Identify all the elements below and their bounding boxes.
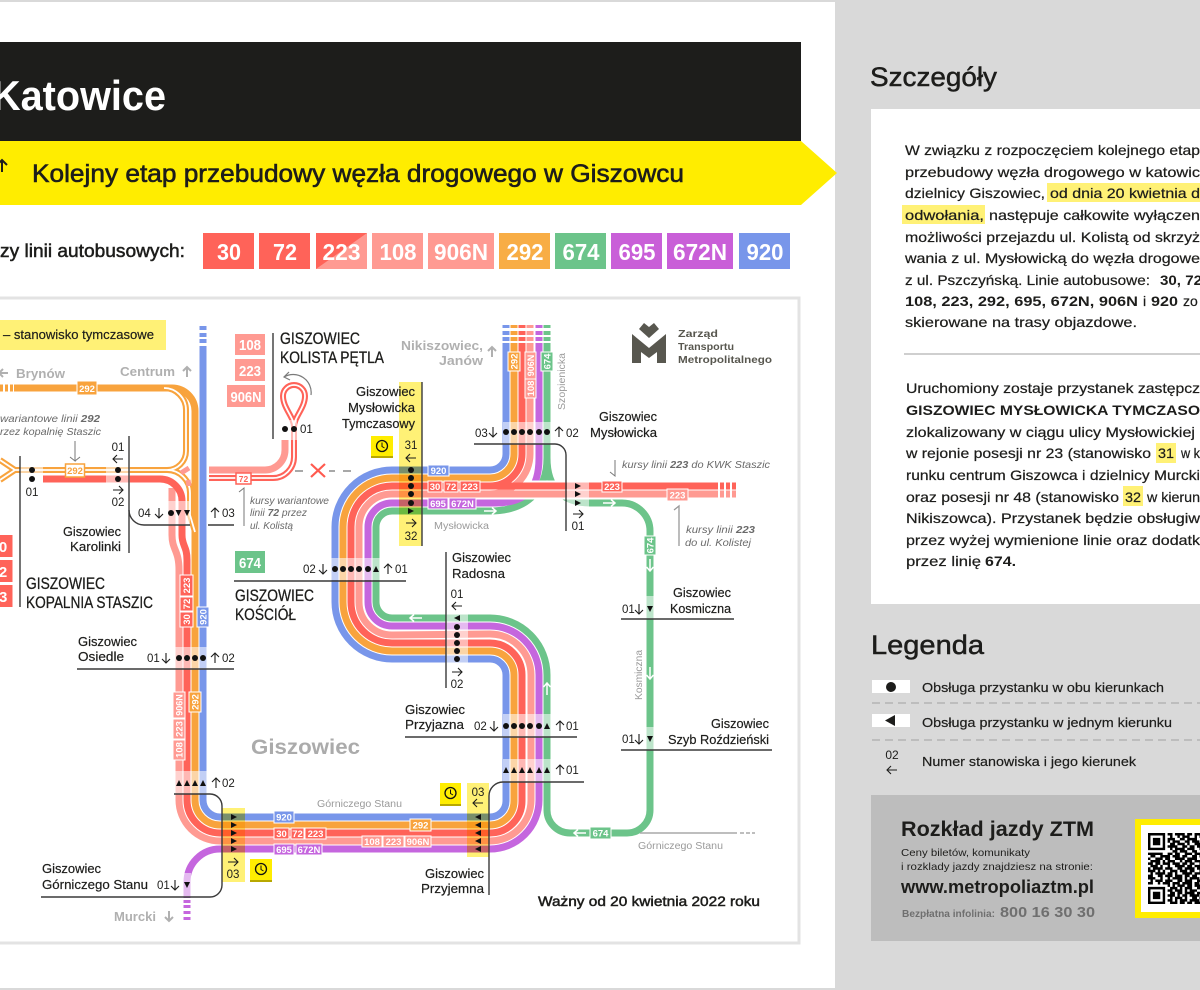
panel: right grey sidebar xyxy=(835,0,1200,990)
variant track: line 292 through Staszic xyxy=(0,388,195,532)
annotation: variant 292 xyxy=(0,413,102,461)
stop name: Karolinki: Karolinki xyxy=(70,539,121,554)
platform numbers: 03 xyxy=(475,428,488,440)
street names: Górniczego Stanu xyxy=(317,799,402,810)
badges: bottom horizontal: 920 xyxy=(276,812,292,824)
badges: bottom horizontal: 108 xyxy=(364,837,380,848)
logo: ZTM: Metropolitalnego xyxy=(678,354,772,366)
line badge 72 xyxy=(259,233,310,269)
track: salmon trunk xyxy=(172,343,531,841)
paragraph one: skierowane na trasy objazdowe. xyxy=(905,314,1137,330)
paragraph one: od dnia 20 kwietnia d xyxy=(1050,185,1200,201)
paragraph one: 30, 72 xyxy=(1160,272,1200,288)
paragraph two: przez wyżej wymienione linie oraz dodatk xyxy=(906,532,1200,548)
annotation: variant 72 xyxy=(239,488,329,532)
paragraph one: przebudowy węzła drogowego w katowic xyxy=(905,164,1200,180)
badges: trunk 223 72 30: 72 xyxy=(182,599,193,609)
badges: bottom horizontal: 292 xyxy=(413,820,428,832)
platform numbers: 01 xyxy=(112,442,124,454)
annotation: variant 292: wariantowe linii 292 xyxy=(0,413,100,425)
platform numbers: 01 xyxy=(451,589,463,601)
route badges xyxy=(66,334,688,856)
panel: timetable info: Ceny biletów, komunikaty xyxy=(901,847,1031,859)
paragraph two: Uruchomiony zostaje przystanek zastępcz xyxy=(906,380,1200,396)
title bar xyxy=(0,42,801,141)
platform numbers: 03 xyxy=(222,508,235,520)
platform numbers: 01 xyxy=(26,487,38,499)
badge: right 223 salmon xyxy=(667,489,688,502)
annotation: 223 to KWK Staszic: kursy linii 223 do KWK Staszic xyxy=(622,459,771,471)
subtitle arrow banner xyxy=(0,141,837,205)
stop name: Przyjemna: Przyjemna xyxy=(421,881,485,896)
panel: timetable info: 800 16 30 30 xyxy=(1000,904,1095,921)
panel: details text xyxy=(871,109,1200,604)
platform numbers: 02 xyxy=(222,778,235,790)
badges: trunk 906N 223 108: 906N xyxy=(174,694,184,716)
legend row: platform number: Numer stanowiska i jego kierunek xyxy=(922,754,1137,769)
panel: timetable info xyxy=(871,795,1200,941)
badge: trunk 292: 292 xyxy=(190,694,202,710)
stop name: Kosmiczna: Kosmiczna xyxy=(670,601,732,616)
track: red trunk xyxy=(43,343,522,833)
badges: trunk 906N 223 108 xyxy=(173,692,186,760)
badges: Myslowicka horizontal: 672N xyxy=(451,499,474,510)
paragraph two: przez linię xyxy=(906,553,981,569)
badge: green 674 bottom: 674 xyxy=(593,828,609,840)
line badge 920 xyxy=(739,233,790,269)
stop name: Kolista Petla: GISZOWIEC xyxy=(280,329,360,348)
paragraph two: oraz posesji nr 48 (stanowisko xyxy=(906,489,1119,505)
line badge 920: 920 xyxy=(746,239,784,265)
platform numbers: 01 xyxy=(622,734,635,746)
stop name: Przyjazna xyxy=(405,702,465,732)
annotation: variant 72: ul. Kolistą xyxy=(250,520,293,532)
badge: variant 292: 292 xyxy=(67,466,83,477)
platform numbers: 02 xyxy=(303,564,316,576)
platform numbers: 02 xyxy=(474,721,487,733)
bus lines row xyxy=(0,233,790,269)
line badge 223: 223 xyxy=(322,239,360,265)
temporary stop legend: – stanowisko tymczasowe xyxy=(3,327,154,342)
paragraph one: zo xyxy=(1183,293,1198,309)
badge: trunk 920: 920 xyxy=(198,609,210,625)
annotation: variant 292: rzez kopalnię Staszic xyxy=(0,426,102,438)
paragraph one: W związku z rozpoczęciem kolejnego etap xyxy=(905,142,1200,158)
stop name: Karolinki xyxy=(63,524,121,554)
badge: variant 72 xyxy=(236,473,251,484)
district name: Giszowiec xyxy=(251,736,360,759)
badges: bottom horizontal: 223 xyxy=(386,837,401,848)
stop name: Karolinki: Giszowiec xyxy=(63,524,121,539)
annotation: variant 72: kursy wariantowe xyxy=(250,495,329,507)
stop name: Radosna: Giszowiec xyxy=(452,550,511,565)
badge: Kolista 108 xyxy=(235,334,265,355)
stop name: Gorniczego Stanu xyxy=(42,861,148,892)
panel: timetable info: i rozklady jazdy znajdziesz na stronie: xyxy=(901,861,1093,873)
stop name: Przyjazna: Giszowiec xyxy=(405,702,465,717)
heading: Legenda: Legenda xyxy=(871,630,985,660)
badge: Kolista 108: 108 xyxy=(239,337,261,354)
stop markers xyxy=(29,426,653,888)
badges: trunk 223 72 30: 30 xyxy=(182,614,193,625)
badge: variant 72: 72 xyxy=(239,474,248,484)
badges: Myslowicka horizontal: 920 xyxy=(431,466,446,477)
badge: 292 top left xyxy=(77,381,97,395)
track: orange line 292 xyxy=(14,343,514,825)
stop name: Myslowicka: Giszowiec xyxy=(599,409,657,424)
panel: legend xyxy=(872,680,1200,774)
subtitle arrow banner: Kolejny etap przebudowy węzła drogowego w Giszowcu xyxy=(32,160,684,188)
line badge 674 xyxy=(555,233,606,269)
paragraph one: odwołania, xyxy=(905,207,984,223)
direction labels: Murcki xyxy=(114,909,156,924)
legend row: one direction: Obsługa przystanku w jednym kierunku xyxy=(922,715,1172,730)
paragraph two: runku centrum Giszowca i dzielnicy Murcki xyxy=(906,467,1200,483)
platform numbers: 01 xyxy=(157,880,170,892)
panel: route map xyxy=(0,298,799,943)
stop name: Przyjazna: Przyjazna xyxy=(405,717,465,732)
platform numbers: 02 xyxy=(112,497,124,509)
white casing over fork xyxy=(490,480,718,500)
paragraph two: 31 xyxy=(1158,445,1174,461)
platform numbers: 04 xyxy=(138,508,151,520)
badge: green 674 bottom xyxy=(590,827,611,840)
stop name: Radosna xyxy=(452,550,511,581)
badge: 292 top left: 292 xyxy=(79,384,95,395)
platform numbers: 31 xyxy=(405,440,417,452)
badges: trunk 906N 223 108: 223 xyxy=(174,721,186,737)
stop name: Myslowicka Tymczasowy: Giszowiec xyxy=(356,384,415,399)
badges: bottom horizontal: 30 xyxy=(276,829,287,840)
paragraph two: w kierun xyxy=(1146,489,1200,505)
temporary stop zones xyxy=(222,382,489,882)
badges: Myslowicka horizontal xyxy=(428,465,480,510)
badges: bottom horizontal: 695 xyxy=(276,845,293,856)
closed road mark xyxy=(295,460,355,482)
badges: top vertical: 906N xyxy=(526,355,536,376)
paragraph one: 920 xyxy=(1151,293,1178,309)
badges: bottom horizontal: 672N xyxy=(298,845,320,856)
street names xyxy=(317,353,755,852)
badges: top vertical: 674 xyxy=(542,353,554,369)
stop name: Myslowicka Tymczasowy: Mysłowicka xyxy=(348,400,416,415)
badges: Myslowicka horizontal: 30 xyxy=(430,482,440,493)
badges: top vertical: 108 xyxy=(526,381,537,396)
line badge 292 xyxy=(499,233,550,269)
platform numbers: 32 xyxy=(405,531,417,543)
badges: trunk 223 72 30: 223 xyxy=(182,578,193,593)
platform numbers: 01 xyxy=(147,653,160,665)
temporary stop legend xyxy=(0,320,166,350)
paragraph two: zlokalizowany w ciągu ulicy Mysłowickiej xyxy=(906,424,1195,440)
direction labels xyxy=(0,338,496,924)
line badge 30: 30 xyxy=(217,239,241,265)
stop name: Szyb Rozdzienski xyxy=(668,716,769,747)
paragraph one: wania z ul. Mysłowicką do węzła drogowe xyxy=(904,250,1200,266)
logo: ZTM: Transportu xyxy=(678,341,734,353)
stop name: Osiedle: Osiedle xyxy=(78,649,124,664)
badges: top vertical xyxy=(508,352,554,398)
line badge 108 xyxy=(372,233,423,269)
platform numbers: 02 xyxy=(451,679,463,691)
paragraph one xyxy=(904,142,1200,330)
badges: bottom horizontal: 906N xyxy=(407,837,429,848)
annotation: variant 72: linii 72 przez xyxy=(250,507,308,519)
stop name: Kosciol xyxy=(235,586,314,624)
stop name: Myslowicka Tymczasowy xyxy=(342,384,416,431)
line badge 108: 108 xyxy=(380,239,417,265)
stop name: Myslowicka Tymczasowy: Tymczasowy xyxy=(342,416,415,431)
badge: green 674 right: 674 xyxy=(646,537,656,553)
stop name: Osiedle: Giszowiec xyxy=(78,634,137,649)
paragraph one: 108, 223, 292, 695, 672N, 906N xyxy=(905,293,1138,309)
badges: Myslowicka horizontal: 223 xyxy=(462,482,478,493)
annotation: 223 to KWK Staszic xyxy=(610,459,771,476)
legend row: platform number xyxy=(885,748,1137,774)
track: line 695 672N purple xyxy=(187,343,539,898)
paragraph one: dzielnicy Giszowiec, xyxy=(905,185,1045,201)
stop name: Przyjemna: Giszowiec xyxy=(425,866,484,881)
left cut-off badges xyxy=(0,535,12,607)
paragraph two: Nikiszowca). Przystanek będzie obsługiw xyxy=(906,510,1200,526)
stop name: Kopalnia Staszic: GISZOWIEC xyxy=(26,574,105,593)
stop name: Myslowicka: Mysłowicka xyxy=(590,425,658,440)
legend row: platform number: 02 xyxy=(885,748,899,762)
street names: Górniczego Stanu xyxy=(638,841,723,852)
platform direction arrows xyxy=(113,427,643,890)
platform numbers: 03 xyxy=(472,787,484,799)
line badge 672N: 672N xyxy=(673,239,727,265)
stop name: Kosmiczna: Giszowiec xyxy=(673,585,731,600)
badges: Myslowicka horizontal: 695 xyxy=(430,499,447,510)
line badge 906N xyxy=(428,233,494,269)
flow arrows on green line xyxy=(410,500,654,836)
stop name: Przyjemna xyxy=(421,866,485,896)
logo: ZTM: Zarząd xyxy=(678,328,718,340)
stop name: Radosna: Radosna xyxy=(452,566,506,581)
badge: trunk 920 xyxy=(197,607,210,627)
icon: clock Gorniczego xyxy=(250,859,272,882)
stop name: Kosmiczna xyxy=(670,585,732,616)
platform numbers: 02 xyxy=(222,653,235,665)
logo: ZTM xyxy=(632,323,772,366)
icon: clock Przyjemna xyxy=(440,783,461,806)
street names: Szopienicka xyxy=(557,353,568,410)
badge: Kolista 223 xyxy=(235,359,265,381)
track: line 674 green xyxy=(376,343,650,833)
line badge 672N xyxy=(667,233,733,269)
paragraph two: GISZOWIEC MYSŁOWICKA TYMCZASO xyxy=(906,402,1200,418)
badge: Kolista 906N: 906N xyxy=(230,389,262,406)
badge: trunk 292 xyxy=(189,692,202,712)
badges: trunk 906N 223 108: 108 xyxy=(174,742,186,758)
clock icons xyxy=(250,436,461,882)
stop name: Kosciol: KOŚCIÓŁ xyxy=(235,605,296,624)
street names: Kosmiczna xyxy=(634,650,645,700)
route tracks xyxy=(0,325,736,920)
badge: Kolista 223: 223 xyxy=(239,363,261,380)
stop name: Szyb Rozdzienski: Szyb Roździeński xyxy=(668,732,769,747)
badges: trunk 223 72 30 xyxy=(180,575,193,627)
legend row: both directions: Obsługa przystanku w obu kierunkach xyxy=(922,680,1164,695)
stop name: Kosciol: GISZOWIEC xyxy=(235,586,314,605)
stop name: Myslowicka xyxy=(590,409,658,440)
annotation: 223 to Kolista xyxy=(674,506,755,549)
annotation: 223 to Kolista: kursy linii 223 xyxy=(686,524,755,536)
line badge 695 xyxy=(611,233,662,269)
panel: timetable info: www.metropoliaztm.pl xyxy=(900,877,1094,897)
direction labels: Nikiszowiec, xyxy=(401,338,483,353)
paragraph one: z ul. Pszczyńską. Linie autobusowe: xyxy=(905,272,1150,288)
direction labels: Centrum xyxy=(120,364,175,379)
dashed track ends xyxy=(200,326,206,343)
platform numbers: 03 xyxy=(227,869,239,881)
heading: Szczegoly: Szczegóły xyxy=(870,62,998,92)
badge: right 223 salmon: 223 xyxy=(670,490,685,502)
paragraph two: w rejonie posesji nr 23 (stanowisko xyxy=(905,445,1151,461)
platform numbers: 01 xyxy=(395,564,408,576)
validity note: Ważny od 20 kwietnia 2022 roku xyxy=(538,893,760,909)
line badge 30 xyxy=(203,233,254,269)
paragraph two: 32 xyxy=(1125,489,1141,505)
badge: Kosciol 674: 674 xyxy=(239,555,262,572)
stop name: Kolista Petla: KOLISTA PĘTLA xyxy=(280,348,385,367)
badges: top vertical: 292 xyxy=(510,354,520,369)
paragraph one: i xyxy=(1143,293,1146,309)
badges: bottom horizontal: 223 xyxy=(308,829,323,840)
platform numbers: 01 xyxy=(572,521,584,533)
stop name: Gorniczego Stanu: Giszowiec xyxy=(42,861,101,876)
badge: right 223 red: 223 xyxy=(604,482,620,493)
paragraph two: 674. xyxy=(985,553,1016,569)
track: blue line 920 xyxy=(203,343,506,817)
line badge 674: 674 xyxy=(562,239,600,265)
stop name: Kopalnia Staszic: KOPALNIA STASZIC xyxy=(26,593,153,612)
platform numbers: 01 xyxy=(566,721,579,733)
badges: bottom horizontal xyxy=(274,811,431,856)
variant track: line 72 to Kolista loop xyxy=(181,385,305,486)
direction labels: Brynów xyxy=(16,366,66,381)
badge: Kolista 906N xyxy=(227,385,265,407)
paragraph one: możliwości przejazdu ul. Kolistą od skrzyż xyxy=(905,229,1200,245)
bus lines row: zy linii autobusowych: xyxy=(0,240,185,261)
street names: Mysłowicka xyxy=(434,521,489,532)
line badge 223 xyxy=(316,233,367,269)
platform numbers: 01 xyxy=(622,604,635,616)
loop direction arrow xyxy=(284,372,311,395)
panel: timetable info: Bezpłatna infolinia: xyxy=(902,908,995,920)
badges: bottom horizontal: 72 xyxy=(292,829,303,840)
badges: Myslowicka horizontal: 72 xyxy=(446,482,456,493)
stop name: Kopalnia Staszic xyxy=(26,574,153,612)
line badge 695: 695 xyxy=(618,239,656,265)
panel: timetable info: Rozkład jazdy ZTM xyxy=(901,818,1094,841)
stop callout lines xyxy=(20,333,772,897)
badge: Kosciol 674 xyxy=(235,551,265,573)
paragraph one: następuje całkowite wyłączen xyxy=(989,207,1200,223)
platform numbers xyxy=(26,424,635,892)
annotation: 223 to Kolista: do ul. Kolistej xyxy=(685,537,752,549)
stop name: Osiedle xyxy=(78,634,137,664)
stop bands xyxy=(20,420,654,897)
platform numbers: 02 xyxy=(566,428,579,440)
line badge 906N: 906N xyxy=(434,239,488,265)
icon: clock Myslowicka xyxy=(371,436,393,458)
stop names xyxy=(26,329,769,896)
platform numbers: 01 xyxy=(566,765,579,777)
stop name: Kolista Petla xyxy=(280,329,385,367)
stop name: Gorniczego Stanu: Górniczego Stanu xyxy=(42,877,148,892)
line badge 72: 72 xyxy=(273,239,297,265)
line badge 292: 292 xyxy=(506,239,544,265)
paragraph two xyxy=(905,380,1200,569)
QR code xyxy=(1135,819,1200,918)
direction labels: Janów xyxy=(439,353,484,368)
platform numbers: 01 xyxy=(300,424,313,436)
stop name: Szyb Rozdzienski: Giszowiec xyxy=(711,716,769,731)
